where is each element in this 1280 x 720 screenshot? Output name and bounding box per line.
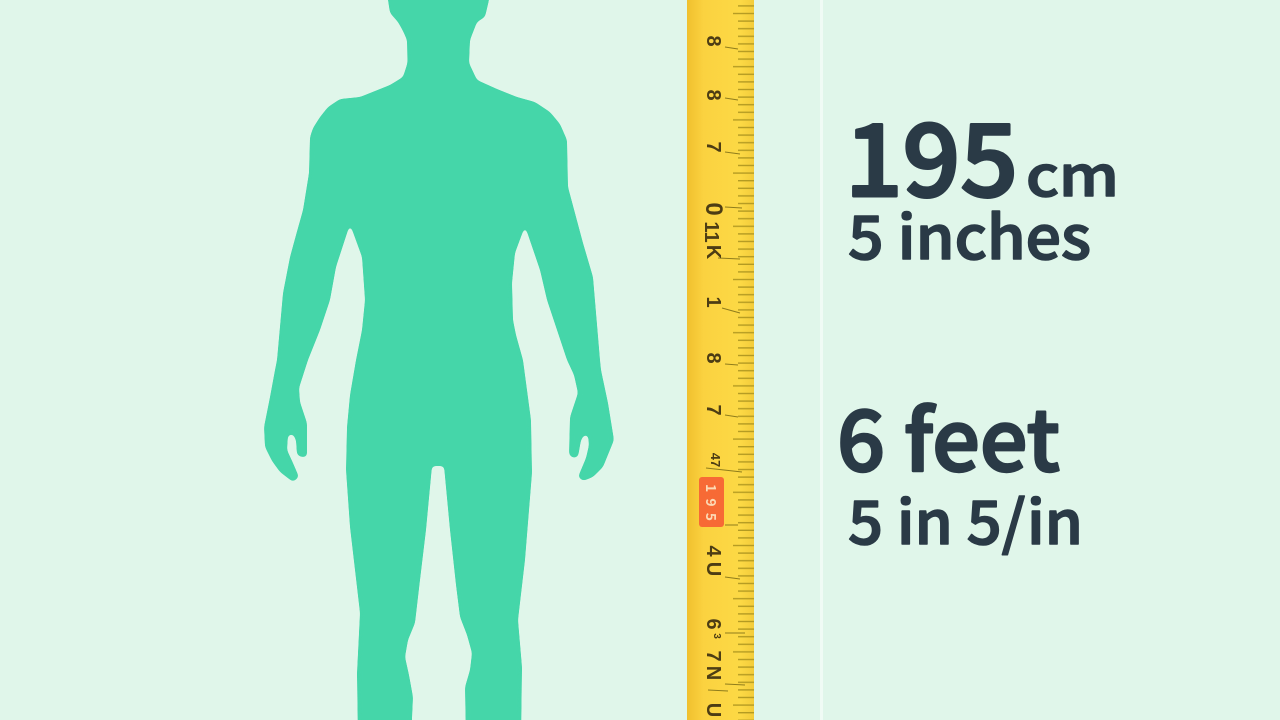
orange marker (699, 477, 724, 527)
value 5 inches: 5 inches (848, 190, 1091, 277)
unit cm: cm (1026, 132, 1119, 213)
tape numerals: 47 (708, 453, 723, 467)
tape numerals: N (702, 666, 724, 680)
imperial height (837, 375, 1083, 562)
tape numerals (700, 35, 727, 717)
tape numerals: 7 (702, 650, 724, 662)
tape numerals: 7 (702, 404, 724, 416)
orange marker: 195 (701, 484, 721, 521)
tape inch markers (706, 47, 745, 691)
human silhouette (264, 0, 614, 720)
tape numerals: 0 (700, 202, 727, 216)
value 195: 195 (845, 80, 1018, 225)
tape numerals: 8 (702, 352, 724, 364)
divider line (820, 0, 823, 720)
tape numerals: 4 (702, 545, 724, 557)
tape tick marks (687, 0, 754, 720)
tape numerals: 8 (702, 89, 724, 101)
value 6 feet: 6 feet (837, 375, 1060, 496)
tape numerals: 3 (711, 633, 722, 639)
tape numerals: 8 (702, 35, 724, 47)
value 5 in 5/in: 5 in 5/in (848, 475, 1083, 562)
metric height (845, 80, 1119, 277)
tape numerals: 1 (702, 296, 724, 308)
tape numerals: U (702, 562, 724, 576)
tape numerals: K (702, 245, 724, 260)
tape numerals: 11 (700, 221, 722, 243)
tape numerals: 7 (702, 141, 724, 153)
tape numerals: U (702, 703, 724, 717)
measuring tape (687, 0, 754, 720)
tape numerals: 6 (702, 618, 724, 630)
